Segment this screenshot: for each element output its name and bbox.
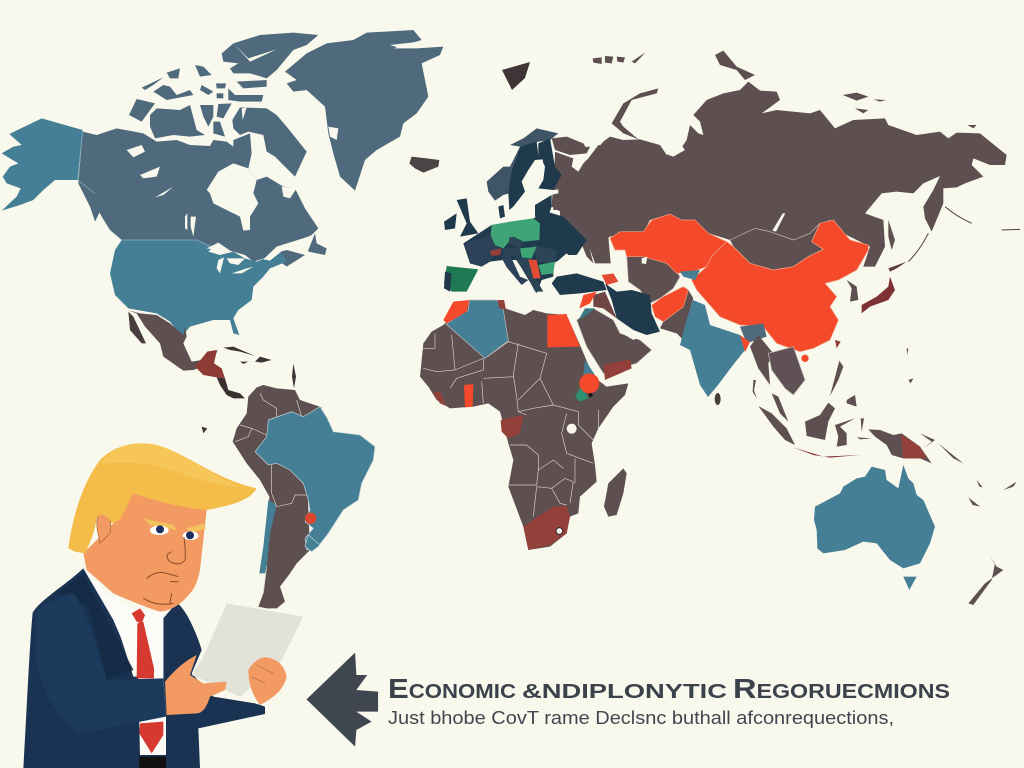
continental Europe base [463,212,587,293]
Italy [500,255,528,285]
West Africa red states [464,384,473,407]
heading: REGORUECMIONS [733,673,950,704]
Caucasus [602,273,618,285]
Tajikistan [680,270,700,280]
Lake Baikal [772,213,785,232]
Lake Victoria [567,424,577,434]
Russian islands [593,51,977,250]
Madagascar [604,468,627,517]
Karelia and northwest Russia [553,145,603,210]
Spain [444,266,478,292]
tie [132,608,163,753]
Yamal gulf [668,115,685,157]
paper sheet [192,603,303,697]
South America [233,385,322,608]
Sweden [508,142,543,210]
heading [388,673,950,704]
Aral Sea [642,257,647,264]
Gulf of Finland [522,189,558,207]
character: man in suit reading a paper [23,443,303,768]
Central America [195,350,225,378]
Iran [605,283,660,335]
western Russia fill [552,180,611,263]
Jordan [578,308,595,320]
country borders [422,333,598,517]
Algeria [446,300,508,358]
hair [68,443,257,553]
Pakistan [660,290,693,342]
shirt [83,568,166,755]
Sri Lanka [715,393,721,405]
Bhutan and Northeast India [740,323,767,343]
Baja California [128,312,146,343]
map: Russia and Asia [560,51,1020,362]
map: Europe and Middle East [444,180,660,380]
subheading: Just bhobe CovT rame Declsnc buthall afconrequections, [388,708,894,728]
China [692,220,868,352]
France [463,235,500,267]
Kazakhstan and Central Asia red [610,214,727,273]
Syria [579,292,597,308]
Korea [847,280,858,302]
Lesotho [556,528,563,534]
Greenland [285,30,443,191]
Balkans north [533,245,557,263]
heading: ECONOMIC [388,673,516,704]
Kuril and Aleutian chain [908,207,1020,262]
South Africa [523,506,570,550]
map: North America [2,30,443,337]
US-Canada border lines [78,131,210,247]
Finland [538,138,562,190]
finger lines [252,665,273,683]
eyebrows [143,518,177,530]
Papua New Guinea [901,434,927,458]
map: Southeast Asia and Oceania [715,335,1017,605]
Black Sea [555,253,595,277]
Canada [78,107,327,267]
Australia [814,465,935,568]
country borders [235,393,307,593]
Java [793,447,860,458]
Morocco [443,300,469,323]
Central African red states [501,415,523,438]
Norway [487,128,558,201]
Central Asian states [627,255,680,303]
Iraq [593,292,617,318]
Ellesmere channel [235,45,277,62]
Hainan and Taiwan [801,355,809,362]
ear [97,513,111,543]
face [83,493,207,612]
Denmark [498,205,505,218]
heading: &NDIPLONYTIC [522,681,727,703]
lapel shading [57,573,133,680]
Tunisia [497,300,506,309]
Ethiopia highlights [583,360,595,375]
hair highlight [100,443,240,487]
map: Canadian Arctic islands [129,33,318,138]
Arabia [577,308,652,373]
right hand [248,657,287,705]
Chile [259,500,277,573]
New Zealand [968,557,1003,605]
Red Sea [567,315,607,387]
arrow pointing left [307,653,378,747]
left hand [165,655,227,715]
eyes [150,526,169,535]
White Sea [553,143,598,172]
Central European states [520,247,537,258]
suit jacket [23,568,265,768]
Indochina [768,347,805,395]
Turkey [552,273,607,295]
Russia [560,82,1007,267]
Baltic states [535,195,552,220]
Gulf of Bothnia [522,159,543,192]
Kola Peninsula [552,137,588,157]
Hudson Bay and lakes [127,42,420,273]
Persian Gulf [617,318,643,340]
Germany and Poland [491,218,540,248]
map: Bangladesh [740,335,750,352]
Tasmania [903,577,917,590]
map: Latin America [127,310,375,608]
Uruguay [305,535,320,552]
Mexico [127,310,217,371]
United States [110,240,287,337]
Japan [862,277,895,313]
Iceland [409,157,439,173]
map: Africa [420,300,628,550]
Caribbean islands [202,347,296,433]
Yemen [603,359,632,380]
African continent [420,300,628,550]
Ireland [444,213,457,230]
Balkans [515,258,543,292]
map: India [680,300,745,397]
map: Svalbard [502,62,530,90]
nose and mouth lines [143,537,185,604]
Alaska [2,118,83,211]
Indonesia and Malaysia [753,348,1017,507]
Egypt [547,314,580,347]
Caspian Sea [610,252,632,292]
Afghanistan [652,287,688,322]
Brazil [255,407,375,550]
Paraguay marker [305,513,316,524]
Portugal [444,272,452,292]
Mongolia [730,223,823,270]
Myanmar [750,335,773,385]
Britain [457,198,478,237]
trousers [139,757,166,768]
map: Scandinavia [487,128,603,210]
sleeve [36,593,166,733]
